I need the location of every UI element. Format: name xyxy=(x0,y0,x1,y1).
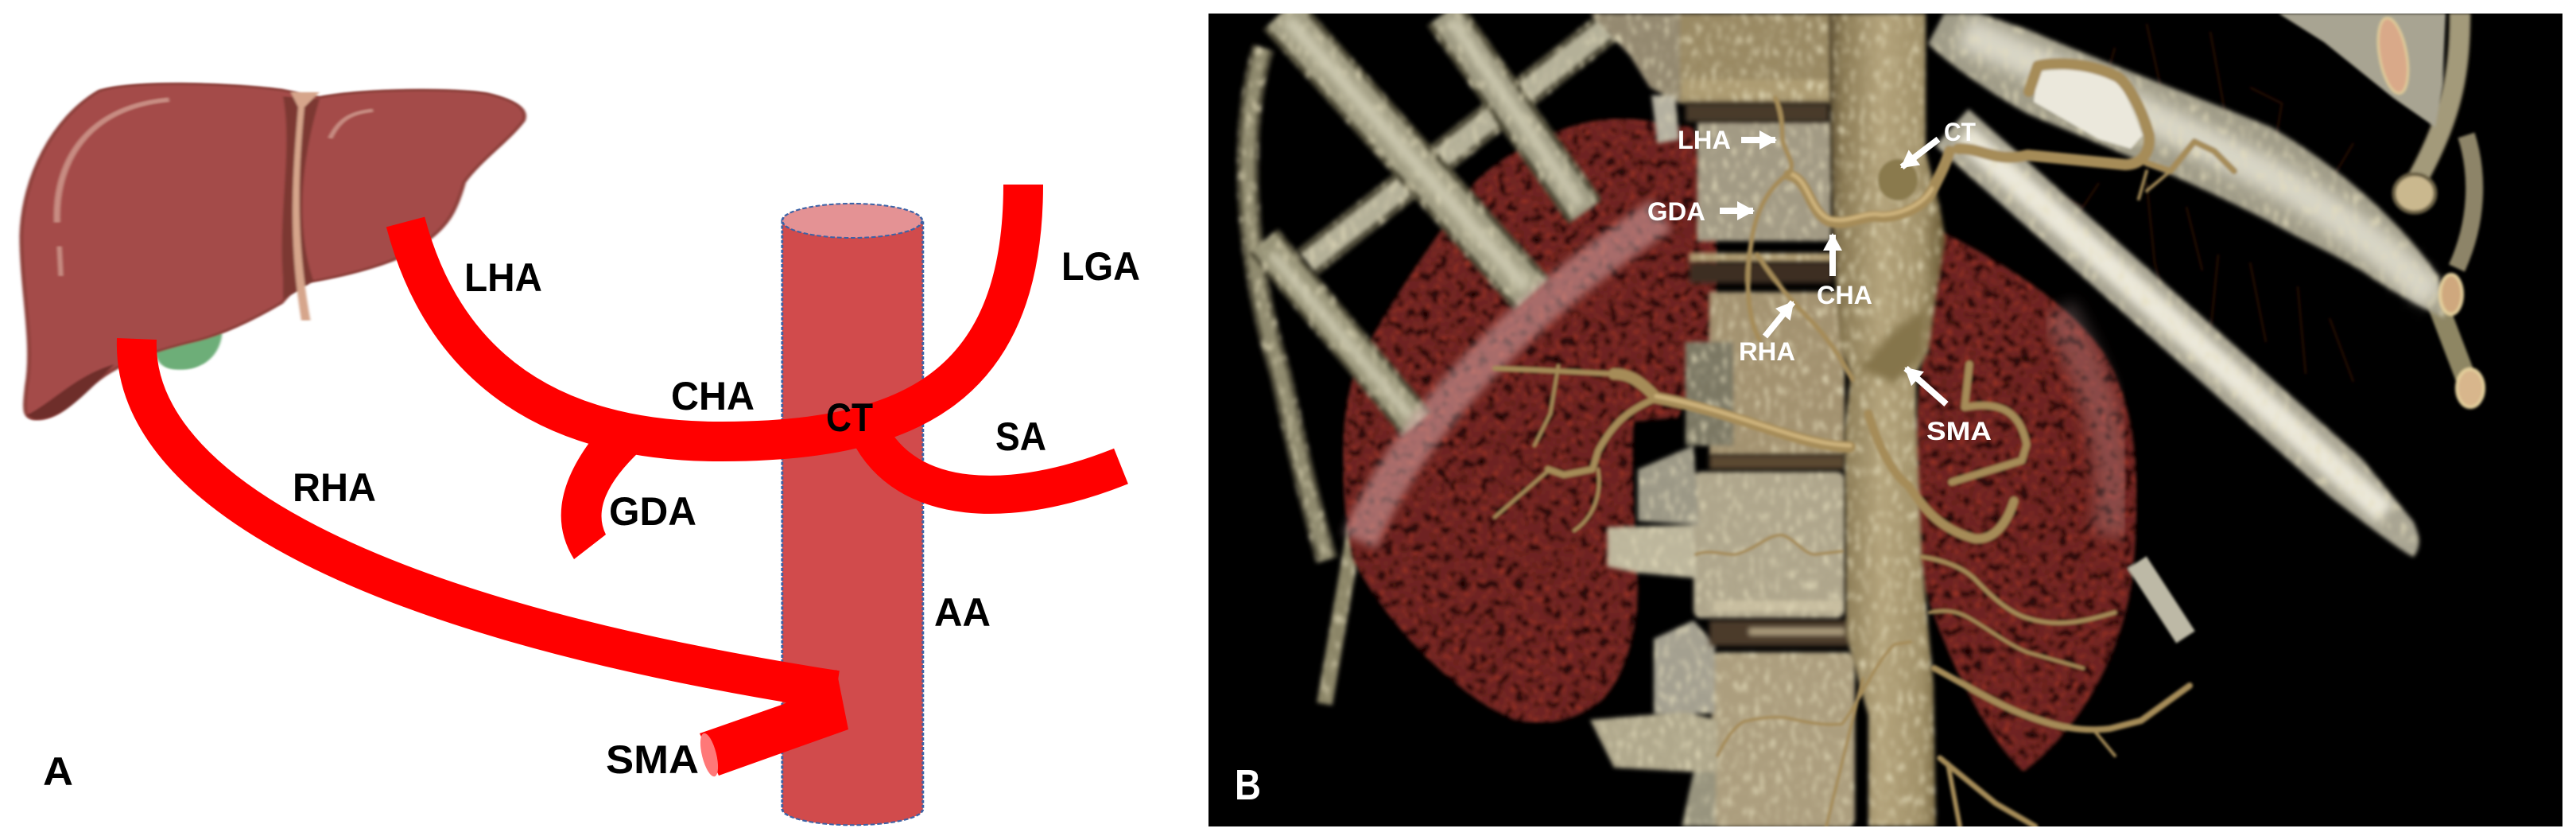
arrow: LHA xyxy=(1741,137,1775,143)
intervertebral discs xyxy=(1686,103,1849,646)
panel letter B: B xyxy=(1235,761,1261,809)
long lower right rib xyxy=(1935,109,2419,557)
kidney right xyxy=(1915,227,2137,772)
panel letter A: A xyxy=(43,749,73,794)
panel B: 3D CT rendering xyxy=(1208,14,2562,827)
label: SA: SA xyxy=(995,414,1046,459)
label: CT: CT xyxy=(826,395,873,440)
label: AA: AA xyxy=(934,590,991,635)
liver illustration xyxy=(21,84,525,419)
CT anatomy drawing xyxy=(1247,14,2484,827)
SMA root shadow xyxy=(1858,306,1928,384)
arteries xyxy=(1495,64,2234,826)
pale rib ghost over kidneys xyxy=(1360,215,1662,541)
spine vertebrae xyxy=(1590,14,1855,827)
vessel: LHA, CHA and LGA arc xyxy=(405,185,1023,441)
vessel: RHA xyxy=(137,339,836,690)
black image background xyxy=(1208,14,2562,826)
label: CHA: CHA xyxy=(671,374,755,418)
upper right pale wedge xyxy=(2279,14,2446,127)
label: SMA: SMA xyxy=(1926,417,1992,445)
arrow: GDA xyxy=(1720,208,1753,214)
lower right small rib xyxy=(2137,562,2186,637)
label: LGA: LGA xyxy=(1061,244,1140,289)
label: GDA: GDA xyxy=(609,489,696,534)
right vertical ribs xyxy=(2457,135,2474,268)
abdominal aorta xyxy=(1829,14,1946,826)
back ribs xyxy=(1247,27,1608,704)
label: CT: CT xyxy=(1944,118,1976,146)
gallbladder xyxy=(152,332,222,370)
front ribs right xyxy=(1928,14,2484,637)
aorta cylinder xyxy=(782,204,923,825)
upper right tail rib xyxy=(2437,302,2470,390)
arrow: CT xyxy=(1902,139,1938,167)
upper right main rib xyxy=(1928,14,2445,318)
rib end caps xyxy=(2394,174,2435,212)
label: LHA: LHA xyxy=(1678,126,1731,154)
arrow: CHA xyxy=(1829,235,1836,276)
label: RHA: RHA xyxy=(293,465,376,510)
vessel: GDA xyxy=(561,438,641,559)
arrow: SMA xyxy=(1906,368,1946,404)
label: CHA: CHA xyxy=(1817,281,1872,309)
label: LHA: LHA xyxy=(464,255,542,300)
label: RHA: RHA xyxy=(1739,337,1795,366)
panel A: schematic diagram xyxy=(21,84,1140,825)
vessel: SA xyxy=(869,432,1121,495)
faint vessels in black background xyxy=(2070,24,2355,382)
label: GDA: GDA xyxy=(1647,197,1705,226)
label: SMA: SMA xyxy=(606,737,699,782)
vessel: SMA xyxy=(696,670,848,778)
arrow: RHA xyxy=(1765,302,1793,336)
kidney left xyxy=(1343,119,1717,723)
front ribs left xyxy=(1263,14,1585,424)
